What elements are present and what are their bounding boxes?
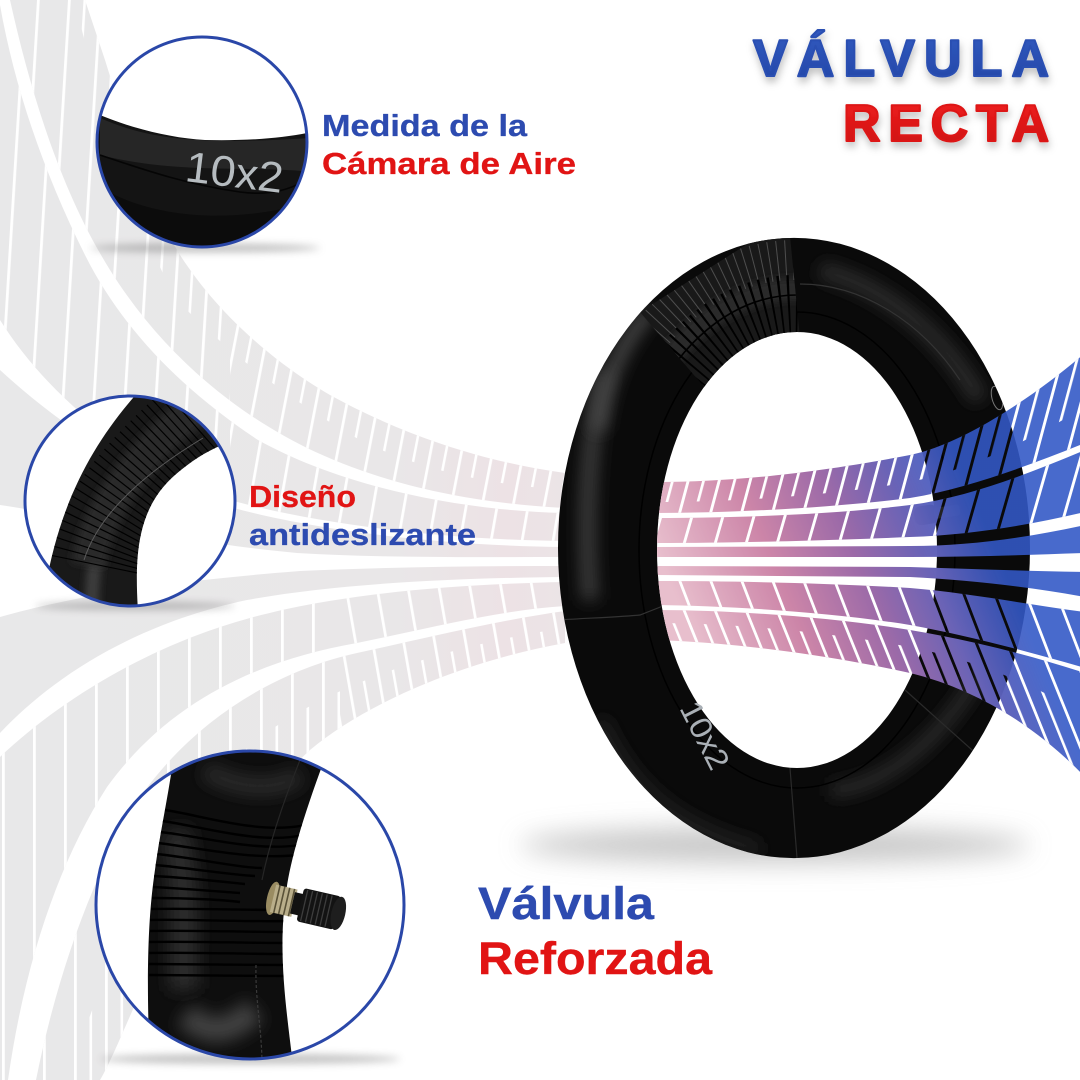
title: VÁLVULA [753, 30, 1049, 88]
label: anti-slip [249, 479, 476, 552]
label: tube size: Medida de la [322, 108, 528, 143]
label: anti-slip: Diseño [249, 479, 356, 514]
callout: anti-slip photo [20, 390, 240, 615]
label: anti-slip: antideslizante [249, 517, 476, 552]
title: RECTA [843, 95, 1049, 153]
valve stem [266, 882, 346, 930]
ribbed section [640, 238, 800, 387]
coloured tire tread overlay, right [655, 353, 1080, 777]
label: tube size: Cámara de Aire [322, 146, 576, 181]
title [753, 30, 1049, 153]
label: reinforced valve [478, 878, 713, 984]
grey tire tread background, left [0, 0, 565, 1080]
tire ground shadow [520, 827, 1030, 863]
valve seen through tread [913, 500, 961, 526]
label: reinforced valve: Reforzada [478, 933, 713, 984]
inner tube photo [558, 238, 1030, 858]
rib lines [149, 810, 305, 976]
tire marking: 10x2 [673, 695, 737, 775]
callout: valve photo [96, 745, 404, 1070]
size marking: 10x2 [183, 143, 286, 203]
callout: tube size photo [90, 37, 320, 252]
label: tube size [322, 108, 576, 181]
label: reinforced valve: Válvula [478, 878, 655, 929]
